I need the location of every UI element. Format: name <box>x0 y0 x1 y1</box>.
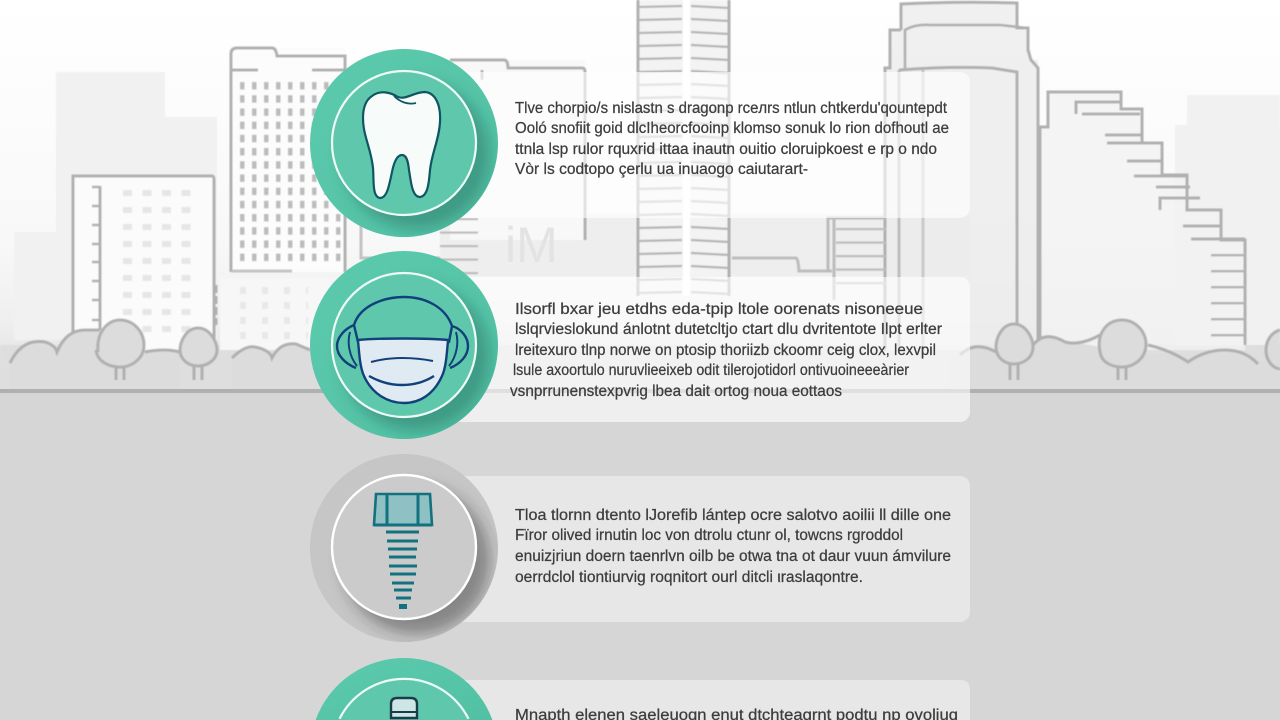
skyline line art <box>10 0 1280 392</box>
icon badge: crown implant <box>316 658 492 720</box>
icon: implant crown top <box>391 698 417 718</box>
building: small block by tower <box>828 218 886 300</box>
icon: tooth <box>363 92 440 198</box>
building: block behind first icon <box>361 60 585 277</box>
ghost lettering behind cards: iM <box>505 217 558 273</box>
text block three: oerrdclol tiontiurvig roqnitort ourl ditcli ιraslaqontre. <box>515 569 863 586</box>
panel: card one backing <box>440 72 970 218</box>
building: central tower <box>638 0 832 297</box>
trees and bushes right <box>950 320 1280 392</box>
icon: surgical mask <box>337 297 468 403</box>
icon: tooth crown crease <box>394 96 416 104</box>
icon badge: dental implant <box>310 454 498 642</box>
building: tall windowed block <box>216 48 348 350</box>
icon badge: tooth <box>310 49 498 237</box>
text block one <box>515 100 949 178</box>
ground line <box>0 389 1280 393</box>
panel: card three backing <box>440 476 970 622</box>
trees and bushes left <box>10 320 320 392</box>
ghost skyline silhouettes <box>0 72 1280 392</box>
text block two: lslqrvieslokund ánlotnt dutetcltjo ctart dlu dvritentote Ilpt erlter <box>515 321 942 338</box>
panel: card four backing <box>440 680 970 720</box>
text block one: ttnla lsp rulor rquxrid ittaa inautn ouitio cloruipkoest e rp o ndo <box>515 141 937 158</box>
text block two: lsule axoortulo nuruvlieeixeb odit tilerojotidorl ontivuoineeeàrier <box>513 362 909 379</box>
background haze <box>0 0 1280 392</box>
text block one: Tlve chorpio/s nislastn s dragonp rceлrs ntlun chtkerdu'qountepdt <box>515 100 948 117</box>
text block two: Ilsorfl bxar jeu etdhs eda-tpip ltole oorenats nisoneeue <box>515 301 923 318</box>
text block two: vsnprrunenstexpvrig lbea dait ortog noua eottaos <box>510 383 842 400</box>
building: low block left <box>73 176 214 350</box>
text block three: Fïror olived irnutin loc von dtrolu ctunr ol, towcns rgroddol <box>515 527 903 544</box>
text block three: Tloa tlornn dtento lJorefib lántep ocre salotvo aoilii ll dille one <box>515 507 951 524</box>
text block three <box>515 507 951 586</box>
text block two: lreitexuro tlnp norwe on ptosip thoriizb ckoomr ceig clox, lexvpil <box>515 342 936 359</box>
ground <box>0 392 1280 720</box>
text block two <box>510 301 942 400</box>
building: stepped block right <box>1040 92 1247 350</box>
building: rounded tower right <box>885 2 1038 350</box>
text block one: Vòr ls codtopo çerlu ua inuaogo caiutarart- <box>515 161 808 178</box>
icon badge: surgical mask <box>310 251 498 439</box>
icon: dental implant <box>374 494 432 609</box>
panel: card two backing <box>440 277 970 422</box>
text block three: enuizjriun doern taenrlvn oilb be otwa tna ot daur vuun ámvilure <box>515 548 951 565</box>
text block one: Ooló snofiit goid dlcIheorcfooinp klomso sonuk lo rion dofhoutl ae <box>515 120 949 137</box>
